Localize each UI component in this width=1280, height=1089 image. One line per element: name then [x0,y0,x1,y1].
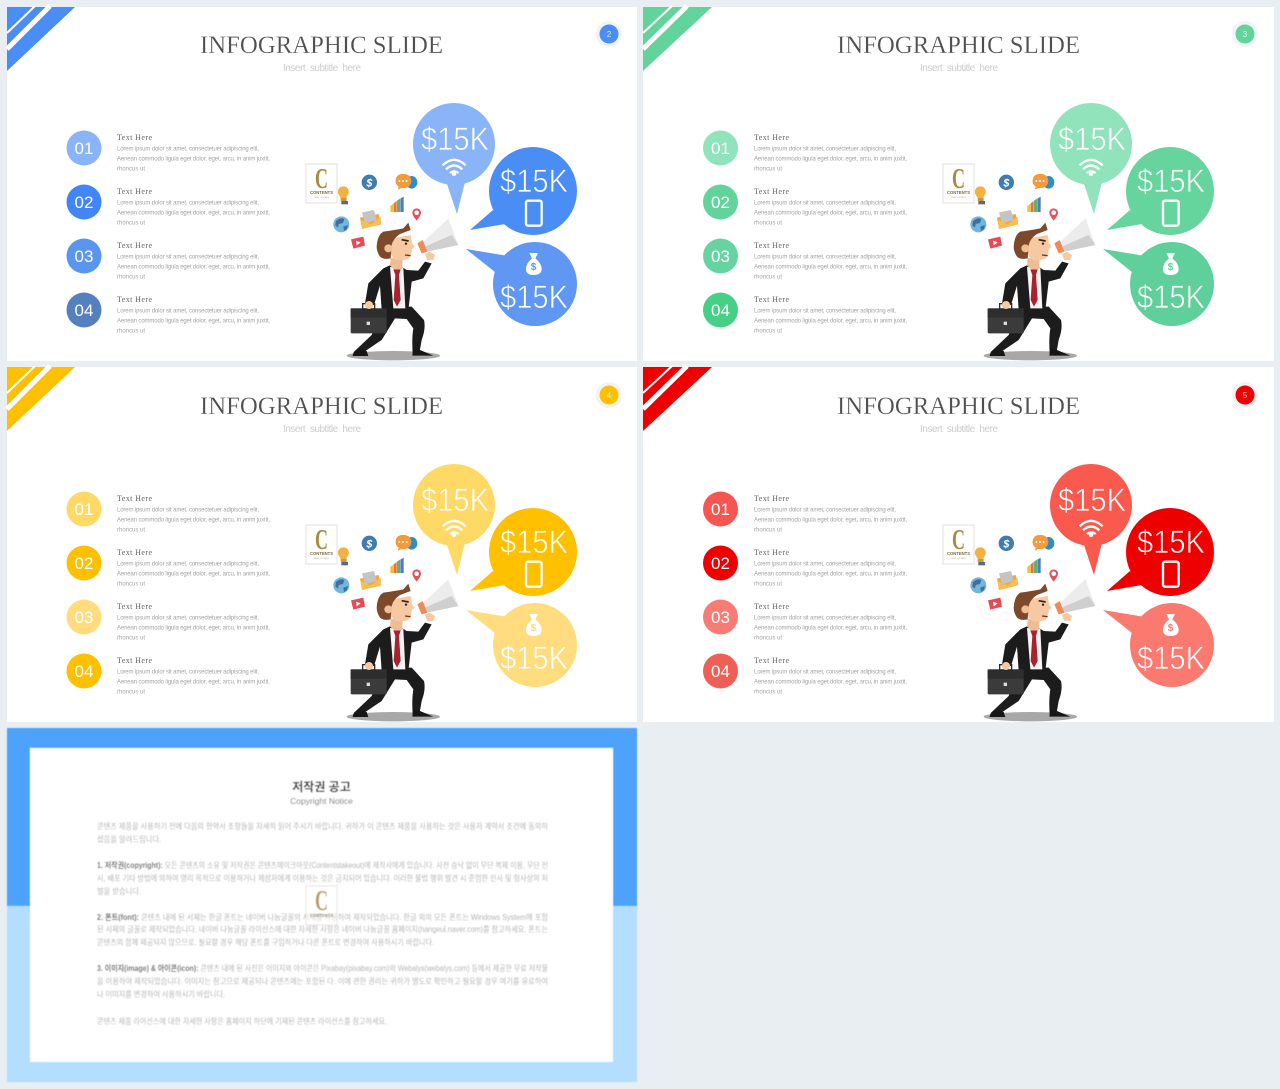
logo [943,525,974,564]
speech bubble: wifi [413,464,495,575]
item 02: 02 [711,554,730,573]
item 01: rhoncus ut [754,528,782,534]
item 04: Text Here [754,656,789,665]
bubble icons [443,521,542,636]
item 01: Text Here [117,133,152,142]
panel: green slide [643,6,1274,361]
item 02: 02 [711,193,730,212]
title: INFOGRAPHIC SLIDE [200,393,443,420]
item 04: 04 [75,301,93,320]
item 03: Aenean commodo ligula eget dolor, eget, arcu, in anim juxtit, [117,626,270,632]
page badge [596,21,622,47]
slide background [643,367,1274,722]
item 04 [703,654,907,696]
speech bubble: money: $15K [500,640,568,676]
item 01: 01 [75,500,93,519]
logo: C [952,164,965,195]
logo: real estate [314,196,330,199]
item 04: rhoncus ut [117,328,145,334]
item 03: rhoncus ut [117,636,145,642]
item 04: 04 [711,662,730,681]
subtitle: Insert subtitle here [920,63,998,74]
item 02: rhoncus ut [754,582,782,588]
bubble icons [1080,521,1179,636]
item 04: Aenean commodo ligula eget dolor, eget, arcu, in anim juxtit, [754,680,907,686]
item 02: rhoncus ut [117,582,145,588]
money bag dollar sign: $ [531,623,537,634]
item 01: Text Here [754,133,789,142]
logo: CONTENTS [947,190,970,195]
page badge [596,382,622,408]
clause 2 font [97,912,549,947]
item 04 [66,292,270,334]
item 01: Text Here [117,494,152,503]
notice subheading: Copyright Notice [290,796,353,806]
item 04: Text Here [754,295,789,304]
item 02: rhoncus ut [117,220,145,226]
speech bubble: wifi: $15K [421,482,489,518]
speech bubble: phone [470,508,577,596]
item 03: Lorem ipsum dolor sit amet, consectetuer adipiscing elit, [754,254,896,260]
item 02: rhoncus ut [754,220,782,226]
logo: CONTENTS [310,190,333,195]
logo: C [315,525,328,556]
money bag dollar sign: $ [531,262,537,273]
title: INFOGRAPHIC SLIDE [837,393,1080,420]
item 03 [66,600,270,642]
speech bubble: money [466,603,577,687]
item 03: Text Here [117,241,152,250]
speech bubble: wifi: $15K [421,121,489,157]
clause 2 font: 콘텐츠의 함께 제공되지 않으므로, 필요할 경우 해당 폰트를 구입하거나 다른 폰트로 변경하여 사용하시기 바랍니다. [97,937,434,947]
logo: real estate [951,196,967,199]
businessman with megaphone [333,174,458,360]
item 01 [66,492,270,534]
speech bubble: wifi [1050,464,1132,575]
item 01: Text Here [754,494,789,503]
item 04 [703,292,907,334]
item 03: 03 [75,608,93,627]
speech bubble: money [466,242,577,326]
panel: red slide [643,366,1274,722]
subtitle: Insert subtitle here [920,424,998,435]
item 03 [703,238,907,280]
item 04: Aenean commodo ligula eget dolor, eget, arcu, in anim juxtit, [117,318,270,324]
item 04: Text Here [117,295,152,304]
panel: copyright notice [7,728,637,1082]
notice intro [97,821,549,844]
speech bubble: wifi: $15K [1058,482,1126,518]
clause 3 image and icon: 3. 이미지(image) & 아이콘(icon): 콘텐츠 내에 된 사진은 이미지와 아이콘은 Pixabay(pixabay.com)와 Webalys(webalys.com) 등에서 제공한 무료 저작물 [97,963,548,973]
page badge [1232,21,1258,47]
item 04: Aenean commodo ligula eget dolor, eget, arcu, in anim juxtit, [754,318,907,324]
speech bubble: phone [470,147,577,235]
item 01: 01 [75,139,93,158]
speech bubble: money [1103,603,1214,687]
closing note: 콘텐츠 제품 라이선스에 대한 자세한 사항은 홈페이지 하단에 기재된 콘텐츠 라이선스를 참고하세요. [97,1016,387,1026]
logo: C [315,164,328,195]
item 04: Lorem ipsum dolor sit amet, consectetuer adipiscing elit, [117,308,259,314]
businessman with megaphone [970,535,1095,721]
clause 1 copyright [97,860,548,896]
item 01: rhoncus ut [754,166,782,172]
speech bubble: money [1103,242,1214,326]
light blue frame bottom [7,906,637,1082]
item 04: rhoncus ut [754,328,782,334]
logo: real estate [314,557,330,560]
item 03: Aenean commodo ligula eget dolor, eget, arcu, in anim juxtit, [754,264,907,270]
item 02: Text Here [754,548,789,557]
item 04: rhoncus ut [754,690,782,696]
item 02: Text Here [117,548,152,557]
corner ribbon [643,6,712,71]
item 03: Text Here [117,602,152,611]
logo [306,525,337,564]
item 04: Lorem ipsum dolor sit amet, consectetuer adipiscing elit, [117,670,259,676]
page badge: 5 [1243,391,1248,400]
item 01: Aenean commodo ligula eget dolor, eget, arcu, in anim juxtit, [117,156,270,162]
logo: C [952,525,965,556]
panel: blue slide [7,6,637,361]
speech bubble: phone: $15K [500,163,568,199]
notice intro: 콘텐츠 제품을 사용하기 전에 다음의 한약서 조항들을 자세히 읽어 주시기 바랍니다. 귀하가 이 콘텐츠 제품을 사용하는 것은 사용자 계약서 조건에 동의하 [97,821,549,831]
item 01: rhoncus ut [117,528,145,534]
logo: CONTENTS [310,551,333,556]
item 03: Aenean commodo ligula eget dolor, eget, arcu, in anim juxtit, [754,626,907,632]
clause 1 copyright: 1. 저작권(copyright): 모든 콘텐츠의 소유 및 저작권은 콘텐츠메이크아웃(Contentstakeout)에 제작사에게 있습니다. 사전 승낙 없이 무단 복제 이용, 무단 전 [97,860,548,870]
item 01: Aenean commodo ligula eget dolor, eget, arcu, in anim juxtit, [754,156,907,162]
page badge: 3 [1243,30,1248,39]
item 02: Aenean commodo ligula eget dolor, eget, arcu, in anim juxtit, [754,210,907,216]
item 01 [703,492,907,534]
subtitle: Insert subtitle here [283,63,361,74]
item 02: Aenean commodo ligula eget dolor, eget, arcu, in anim juxtit, [117,572,270,578]
clause 3 image and icon: 나 이미지를 변경하여 사용하시기 바랍니다. [97,989,225,999]
item 02: Lorem ipsum dolor sit amet, consectetuer adipiscing elit, [117,562,259,568]
item 03: Lorem ipsum dolor sit amet, consectetuer adipiscing elit, [754,616,896,622]
item 01: Aenean commodo ligula eget dolor, eget, arcu, in anim juxtit, [117,518,270,524]
slide background [643,7,1274,361]
businessman with megaphone [970,174,1095,360]
logo watermark: C [315,886,328,917]
item 03 [703,600,907,642]
item 03: 03 [75,247,93,266]
item 03 [66,238,270,280]
item 03: 03 [711,608,730,627]
item 02: Text Here [754,187,789,196]
item 03: Text Here [754,241,789,250]
speech bubble: money: $15K [1137,640,1205,676]
item 04: Lorem ipsum dolor sit amet, consectetuer adipiscing elit, [754,308,896,314]
item 02 [703,184,907,226]
item 02 [66,184,270,226]
logo [943,164,974,203]
item 02: Text Here [117,187,152,196]
logo: real estate [951,557,967,560]
item 03: rhoncus ut [117,274,145,280]
money bag dollar sign: $ [1168,623,1174,634]
clause 2 font: 2. 폰트(font): 콘텐츠 내에 된 서체는 한글 폰트는 네이버 나눔글꼴의 서체를 사용하여 제작되었습니다. 한글 외의 모든 폰트는 Windows System에 포함 [97,912,549,922]
logo [306,164,337,203]
speech bubble: money: $15K [500,279,568,315]
item 02: Aenean commodo ligula eget dolor, eget, arcu, in anim juxtit, [754,572,907,578]
item 01 [703,130,907,172]
item 04: 04 [711,301,730,320]
page badge: 2 [607,30,612,39]
item 04: Lorem ipsum dolor sit amet, consectetuer adipiscing elit, [754,670,896,676]
item 02: Aenean commodo ligula eget dolor, eget, arcu, in anim juxtit, [117,210,270,216]
title: INFOGRAPHIC SLIDE [837,32,1080,59]
item 02 [703,546,907,588]
item 01: Lorem ipsum dolor sit amet, consectetuer adipiscing elit, [117,508,259,514]
clause 3 image and icon [97,963,548,999]
item 03: Lorem ipsum dolor sit amet, consectetuer adipiscing elit, [117,616,259,622]
page badge [1232,382,1258,408]
corner ribbon [643,366,712,431]
slide background [7,367,637,722]
clause 1 copyright: 벌을 받습니다. [97,886,141,896]
item 02 [66,546,270,588]
speech bubble: wifi: $15K [1058,121,1126,157]
clause 2 font: 된 서체의 글꼴로 제작되었습니다. 네이버 나눔글꼴 라이선스에 대한 자세한 사항은 네이버 나눔글꼴 홈페이지(hangeul.naver.com)를 참고하세요. 폰트는 [97,924,548,934]
item 03: rhoncus ut [754,636,782,642]
clause 1 copyright: 시, 배포 기타 방법에 의하여 영리 목적으로 이용하거나 제삼자에게 이용하는 것은 금지되어 있습니다. 이러한 불법 행위 발견 시 준엄한 민사 및 형사상의 처 [97,873,548,883]
logo watermark [306,886,337,925]
corner ribbon [7,6,75,71]
bubble icons [1080,160,1179,275]
money bag dollar sign: $ [1168,262,1174,273]
subtitle: Insert subtitle here [283,424,361,435]
item 01: 01 [711,500,730,519]
item 03: 03 [711,247,730,266]
item 01: Lorem ipsum dolor sit amet, consectetuer adipiscing elit, [117,146,259,152]
notice heading: 저작권 공고 [292,779,351,794]
notice intro: 셨음을 알려드립니다. [97,834,161,844]
item 03: rhoncus ut [754,274,782,280]
item 01: 01 [711,139,730,158]
corner ribbon [7,366,75,431]
businessman with megaphone [333,535,458,721]
item 04: rhoncus ut [117,690,145,696]
blue frame top [7,728,637,906]
panel: yellow slide [7,366,637,722]
clause 3 image and icon: 을 이용하여 제작되었습니다. 이미지는 참고으로 제공되나 콘텐츠에는 포함된 다. 이에 관한 권리는 귀하가 별도로 확인하고 필요할 경우 여기를 유료하여 [97,976,548,986]
speech bubble: phone [1107,147,1214,235]
speech bubble: wifi [413,103,495,214]
item 02: 02 [75,193,93,212]
title: INFOGRAPHIC SLIDE [200,32,443,59]
item 01: Aenean commodo ligula eget dolor, eget, arcu, in anim juxtit, [754,518,907,524]
item 03: Aenean commodo ligula eget dolor, eget, arcu, in anim juxtit, [117,264,270,270]
item 02: Lorem ipsum dolor sit amet, consectetuer adipiscing elit, [754,200,896,206]
item 04: Aenean commodo ligula eget dolor, eget, arcu, in anim juxtit, [117,680,270,686]
item 01: Lorem ipsum dolor sit amet, consectetuer adipiscing elit, [754,508,896,514]
item 02: 02 [75,554,93,573]
item 01: rhoncus ut [117,166,145,172]
item 04: 04 [75,662,93,681]
item 02: Lorem ipsum dolor sit amet, consectetuer adipiscing elit, [117,200,259,206]
speech bubble: phone: $15K [500,524,568,560]
logo: CONTENTS [947,551,970,556]
item 04: Text Here [117,656,152,665]
item 03: Text Here [754,602,789,611]
item 04 [66,654,270,696]
item 02: Lorem ipsum dolor sit amet, consectetuer adipiscing elit, [754,562,896,568]
slide background [7,7,637,361]
item 01: Lorem ipsum dolor sit amet, consectetuer adipiscing elit, [754,146,896,152]
speech bubble: phone: $15K [1137,524,1205,560]
speech bubble: phone: $15K [1137,163,1205,199]
speech bubble: wifi [1050,103,1132,214]
item 03: Lorem ipsum dolor sit amet, consectetuer adipiscing elit, [117,254,259,260]
logo watermark: CONTENTS [310,913,333,918]
bubble icons [443,160,542,275]
speech bubble: money: $15K [1137,279,1205,315]
item 01 [66,130,270,172]
page badge: 4 [607,391,612,400]
speech bubble: phone [1107,508,1214,596]
white notice sheet [30,748,613,1062]
